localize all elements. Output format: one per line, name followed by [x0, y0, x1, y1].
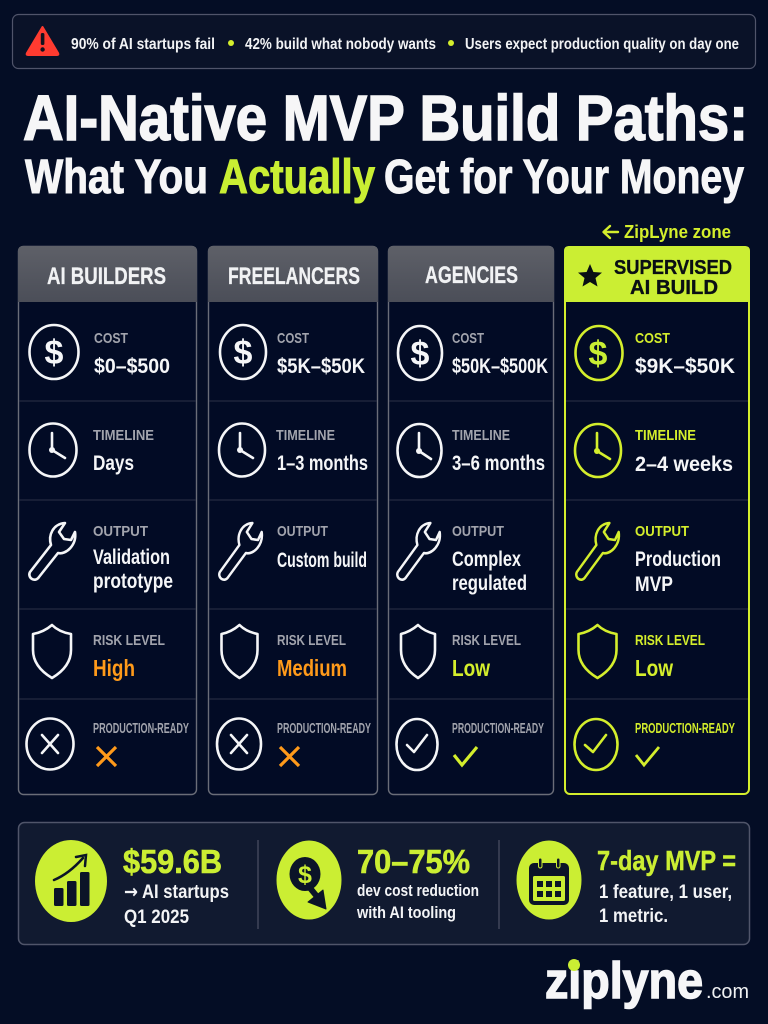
cost cell: $9K–$50K — [635, 354, 735, 378]
heading: AI builders: AI BUILDERS — [47, 263, 166, 290]
production-ready cell: PRODUCTION-READY — [452, 721, 544, 737]
risk cell: RISK LEVEL — [452, 632, 521, 649]
risk cell — [578, 625, 705, 681]
cost cell — [220, 325, 365, 379]
timeline cell — [398, 424, 545, 477]
cost cell — [576, 326, 735, 380]
alert text: 42% build what nobody wants — [245, 36, 436, 53]
icon: cost reduction: $ — [298, 861, 312, 889]
stat: cost reduction — [356, 843, 479, 922]
risk cell: RISK LEVEL — [635, 632, 705, 649]
output cell: prototype — [93, 569, 173, 593]
production-ready cell — [217, 718, 371, 770]
stat: cost reduction: with AI tooling — [356, 903, 456, 922]
risk cell: Low — [635, 655, 673, 681]
timeline cell: 1–3 months — [277, 451, 368, 475]
cost cell: COST — [277, 330, 309, 347]
stat: 7-day MVP: 1 metric. — [599, 906, 668, 927]
output cell: Validation — [93, 545, 170, 569]
cost cell: $50K–$500K — [452, 354, 548, 378]
risk cell — [222, 625, 347, 681]
stat: 7-day MVP — [597, 845, 736, 927]
output cell: OUTPUT — [93, 523, 148, 540]
timeline cell: TIMELINE — [93, 427, 154, 444]
output cell — [29, 523, 173, 593]
output cell: Custom build — [277, 548, 367, 572]
panel: AI builders — [18, 246, 197, 794]
heading: supervised AI build: AI BUILD — [630, 276, 718, 299]
risk cell — [33, 625, 165, 681]
stat: funding — [123, 843, 229, 928]
cost cell: COST — [635, 330, 670, 347]
timeline cell: 3–6 months — [452, 451, 545, 475]
output cell: OUTPUT — [635, 523, 689, 540]
timeline cell: 2–4 weeks — [635, 452, 733, 476]
heading: agencies: AGENCIES — [425, 262, 518, 289]
icon: growth chart — [35, 840, 107, 922]
output cell: MVP — [635, 572, 673, 596]
risk cell: Medium — [277, 655, 347, 681]
timeline cell: Days — [93, 451, 134, 475]
timeline cell: TIMELINE — [635, 427, 696, 444]
output cell: regulated — [452, 571, 527, 595]
alert text — [71, 36, 739, 53]
icon: cost reduction — [276, 840, 342, 920]
icon: calendar — [516, 840, 582, 920]
output cell: OUTPUT — [277, 523, 328, 540]
production-ready cell — [26, 718, 189, 770]
cost cell: COST — [94, 330, 128, 347]
stat: cost reduction: 70–75% — [357, 843, 470, 880]
cost cell — [398, 326, 548, 380]
panel: supervised AI build — [564, 246, 750, 794]
stat: 7-day MVP: 1 feature, 1 user, — [599, 882, 732, 903]
cost cell: $0–$500 — [94, 354, 170, 378]
cost cell: $5K–$50K — [277, 354, 365, 378]
production-ready cell: PRODUCTION-READY — [93, 721, 189, 737]
logo: .com — [706, 981, 749, 1003]
title: Actually — [219, 151, 375, 204]
stat: funding: → AI startups — [124, 881, 229, 903]
output cell: Complex — [452, 547, 521, 571]
risk cell: Low — [452, 655, 490, 681]
timeline cell: TIMELINE — [276, 427, 335, 444]
output cell — [219, 523, 367, 580]
alert text: 90% of AI startups fail — [71, 36, 215, 53]
timeline cell: TIMELINE — [452, 427, 510, 444]
cost cell — [30, 325, 170, 379]
output cell: Production — [635, 547, 721, 571]
cost cell: COST — [452, 330, 484, 347]
risk cell: RISK LEVEL — [277, 632, 346, 649]
output cell: OUTPUT — [452, 523, 504, 540]
panel: stats — [18, 822, 750, 944]
heading: freelancers: FREELANCERS — [228, 263, 360, 290]
risk cell — [401, 625, 521, 681]
alert bar — [12, 14, 756, 68]
logo: ziplyne — [545, 952, 703, 1009]
timeline cell — [30, 424, 154, 476]
zone callout: ZipLyne zone — [624, 222, 731, 242]
stat: funding: Q1 2025 — [124, 907, 189, 928]
production-ready cell — [574, 719, 735, 770]
title: What You — [25, 151, 208, 204]
cost cell: $ — [234, 334, 253, 372]
panel: freelancers — [208, 246, 378, 794]
timeline cell — [575, 424, 733, 477]
title — [23, 82, 748, 204]
cost cell: $ — [45, 334, 64, 372]
cost cell: $ — [589, 335, 608, 373]
icon: warning triangle — [27, 27, 58, 55]
output cell — [576, 523, 721, 596]
stat: cost reduction: dev cost reduction — [357, 881, 479, 900]
panel: agencies — [388, 246, 554, 794]
timeline cell — [219, 424, 368, 476]
stat: funding: $59.6B — [123, 843, 222, 880]
output cell — [397, 523, 527, 595]
risk cell: High — [93, 655, 135, 681]
risk cell: RISK LEVEL — [93, 632, 165, 649]
cost cell: $ — [411, 335, 430, 373]
stat: 7-day MVP: 7-day MVP = — [597, 845, 736, 876]
heading: supervised AI build — [578, 256, 732, 299]
production-ready cell — [396, 719, 544, 770]
production-ready cell: PRODUCTION-READY — [277, 721, 371, 737]
heading: supervised AI build: SUPERVISED — [614, 256, 732, 279]
